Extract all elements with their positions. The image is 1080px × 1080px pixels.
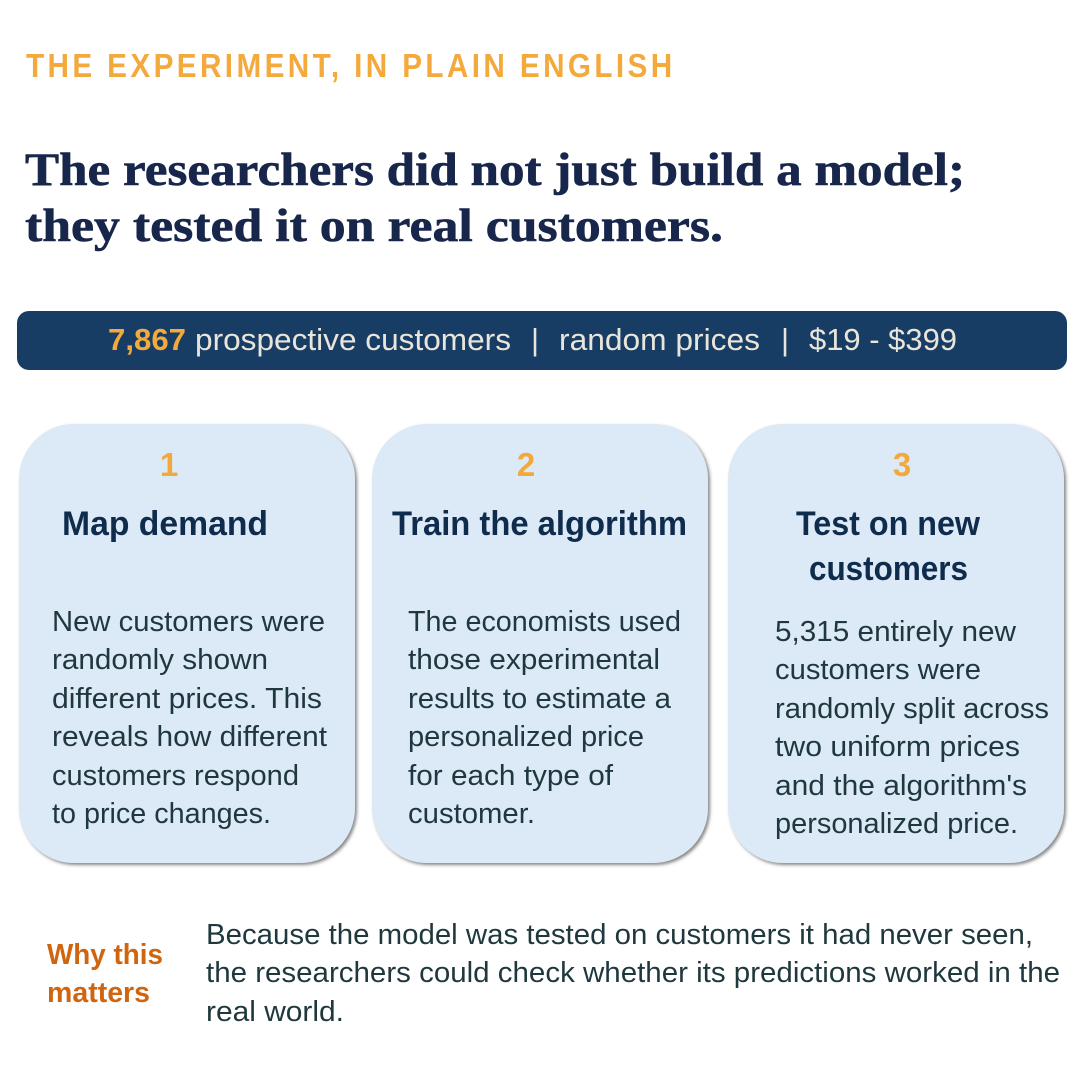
step 1 body: customers respond <box>52 760 299 792</box>
step number 3: 3 <box>893 446 911 483</box>
why this matters label <box>47 939 163 1009</box>
step 3 body: 5,315 entirely new <box>775 616 1017 648</box>
stats banner: prospective customers <box>195 322 511 357</box>
step 3 heading: customers <box>809 550 968 588</box>
step 3 heading: Test on new <box>796 505 981 543</box>
step 2 body <box>408 606 681 830</box>
step 2 body: personalized price <box>408 721 644 753</box>
step 1 heading: Map demand <box>62 505 268 543</box>
step 3 body: personalized price. <box>775 808 1018 840</box>
panel: step 3 test on new customers <box>728 424 1064 863</box>
stats banner: | <box>781 322 789 357</box>
step 1 body: randomly shown <box>52 644 268 676</box>
why this matters label: matters <box>47 977 150 1009</box>
step 2 heading: Train the algorithm <box>392 505 687 543</box>
main heading <box>25 144 965 252</box>
step 1 body: New customers were <box>52 606 325 638</box>
step 2 body: results to estimate a <box>408 683 672 715</box>
stats banner: random prices <box>559 322 760 357</box>
step 3 body <box>775 616 1049 840</box>
stats banner: | <box>531 322 539 357</box>
step 3 body: and the algorithm's <box>775 770 1027 802</box>
eyebrow title: THE EXPERIMENT, IN PLAIN ENGLISH <box>26 48 672 84</box>
step 1 body: to price changes. <box>52 798 271 830</box>
step number 1: 1 <box>160 446 178 483</box>
why this matters text <box>206 919 1060 1028</box>
step 2 body: those experimental <box>408 644 660 676</box>
step 1 body: different prices. This <box>52 683 322 715</box>
why this matters text: the researchers could check whether its predictions worked in the <box>206 957 1060 989</box>
stats banner <box>17 311 1067 370</box>
main heading: The researchers did not just build a model; <box>25 144 965 196</box>
why this matters text: real world. <box>206 996 344 1028</box>
step 2 body: customer. <box>408 798 535 830</box>
why this matters label: Why this <box>47 939 163 971</box>
main heading: they tested it on real customers. <box>25 200 723 252</box>
step 2 body: The economists used <box>408 606 681 638</box>
stats banner: 7,867 <box>108 322 186 357</box>
step 3 heading <box>796 505 981 588</box>
stats banner: $19 - $399 <box>809 322 957 357</box>
step 3 body: customers were <box>775 654 981 686</box>
step 1 body: reveals how different <box>52 721 327 753</box>
step number 2: 2 <box>517 446 535 483</box>
panel: step 2 train the algorithm <box>372 424 708 863</box>
step 3 body: two uniform prices <box>775 731 1020 763</box>
step 3 body: randomly split across <box>775 693 1049 725</box>
panel: step 1 map demand <box>19 424 355 863</box>
step 2 body: for each type of <box>408 760 614 792</box>
step 1 body <box>52 606 327 830</box>
why this matters text: Because the model was tested on customers it had never seen, <box>206 919 1033 951</box>
